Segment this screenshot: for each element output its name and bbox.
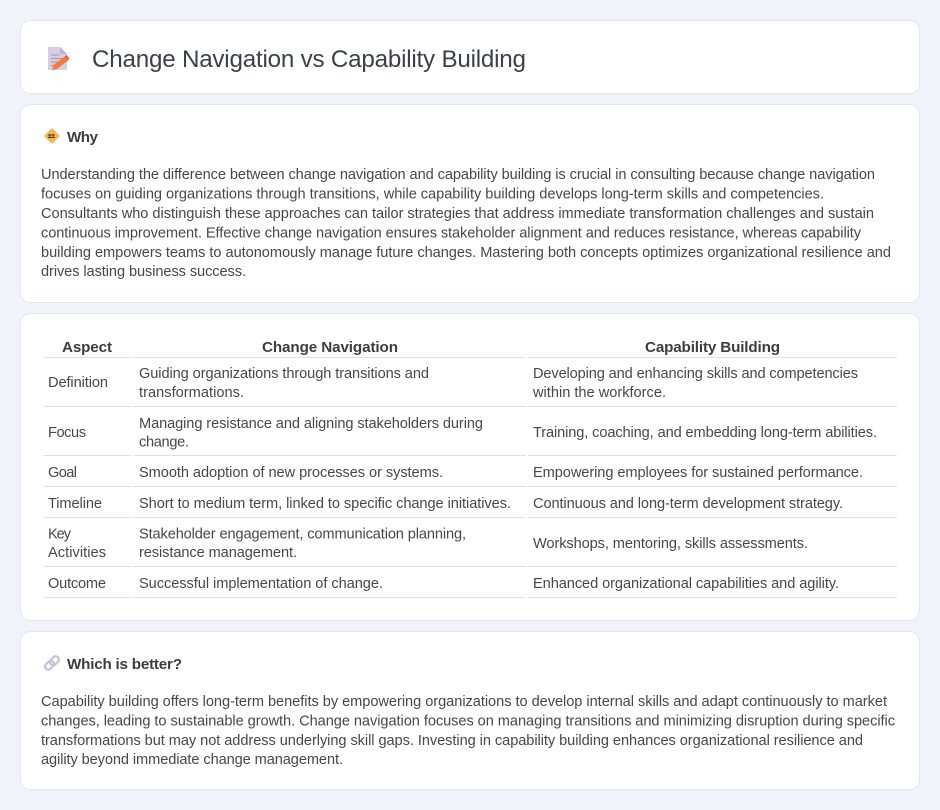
- text block: why: Consultants who distinguish these approaches can tailor strategies that address immediate transformation challenges and sustain: [41, 206, 874, 222]
- icon: warning diamond: [44, 128, 60, 144]
- panel: comparison table: [20, 314, 920, 620]
- panel: why: [20, 104, 920, 302]
- text block: which is better: agility beyond immediate change management.: [41, 752, 343, 768]
- row: outcome: [43, 576, 897, 598]
- row: key activities: resistance management.: [139, 545, 297, 561]
- text block: why: drives lasting business success.: [41, 264, 246, 280]
- row: definition: Definition: [48, 375, 108, 391]
- panel: title header: [20, 20, 920, 94]
- row: timeline: Short to medium term, linked to specific change initiatives.: [139, 496, 511, 512]
- row: focus: Focus: [48, 425, 86, 441]
- row: key activities: [43, 526, 897, 566]
- text block: which is better: changes, leading to sustainable growth. Change navigation focuses on managing transitions and minimizing disruption during specific: [41, 714, 895, 730]
- text block: which is better: transformations but may not address underlying skill gaps. Investing in capability building enhances organizational resilience and: [41, 733, 863, 749]
- row: definition: Developing and enhancing skills and competencies: [533, 366, 858, 382]
- row: outcome: Outcome: [48, 576, 106, 592]
- text block: why: continuous improvement. Effective change navigation ensures stakeholder alignment and reduces resistance, whereas capability: [41, 226, 862, 242]
- row: definition: transformations.: [139, 385, 244, 401]
- row: definition: Guiding organizations through transitions and: [139, 366, 429, 382]
- row: outcome: Successful implementation of change.: [139, 576, 383, 592]
- row: focus: [43, 416, 897, 456]
- text block: which is better: Capability building offers long-term benefits by empowering organizations to develop internal skills and adapt continuously to market: [41, 694, 887, 710]
- row: timeline: Timeline: [48, 496, 102, 512]
- text block: why: focuses on guiding organizations through transitions, while capability building develops long-term skills and competencies.: [41, 186, 824, 202]
- row: goal: [43, 465, 897, 486]
- row: definition: [43, 366, 897, 406]
- row: key activities: Workshops, mentoring, skills assessments.: [533, 536, 808, 552]
- row: key activities: Stakeholder engagement, communication planning,: [139, 526, 466, 542]
- row: timeline: Continuous and long-term development strategy.: [533, 496, 843, 512]
- table header row: Capability Building: [645, 339, 780, 356]
- text block: why: building empowers teams to autonomously manage future changes. Mastering both concepts optimizes organizational resilience and: [41, 245, 891, 261]
- row: goal: Empowering employees for sustained performance.: [533, 465, 863, 481]
- row: goal: Goal: [48, 465, 77, 481]
- title: Change Navigation vs Capability Building: [92, 46, 526, 73]
- icon: memo with pencil: [48, 47, 70, 70]
- row: key activities: Key: [48, 526, 72, 542]
- table header row: Change Navigation: [262, 339, 398, 356]
- row: goal: Smooth adoption of new processes or systems.: [139, 465, 443, 481]
- row: definition: within the workforce.: [532, 385, 666, 401]
- heading: why: Why: [67, 129, 99, 146]
- row: focus: Training, coaching, and embedding long-term abilities.: [533, 425, 877, 441]
- panel: which is better: [20, 632, 920, 790]
- table header row: Aspect: [62, 339, 112, 356]
- table header row: [43, 339, 897, 358]
- text block: why: Understanding the difference between change navigation and capability building is crucial in consulting because change navigation: [41, 167, 875, 183]
- row: focus: Managing resistance and aligning stakeholders during: [139, 416, 483, 432]
- text block: which is better: [41, 694, 895, 768]
- row: focus: change.: [139, 434, 189, 450]
- row: outcome: Enhanced organizational capabilities and agility.: [533, 576, 839, 592]
- heading: which is better: Which is better?: [67, 656, 182, 673]
- text block: why: [41, 167, 891, 280]
- row: timeline: [43, 496, 897, 518]
- row: key activities: Activities: [48, 545, 106, 561]
- icon: link: [44, 655, 60, 671]
